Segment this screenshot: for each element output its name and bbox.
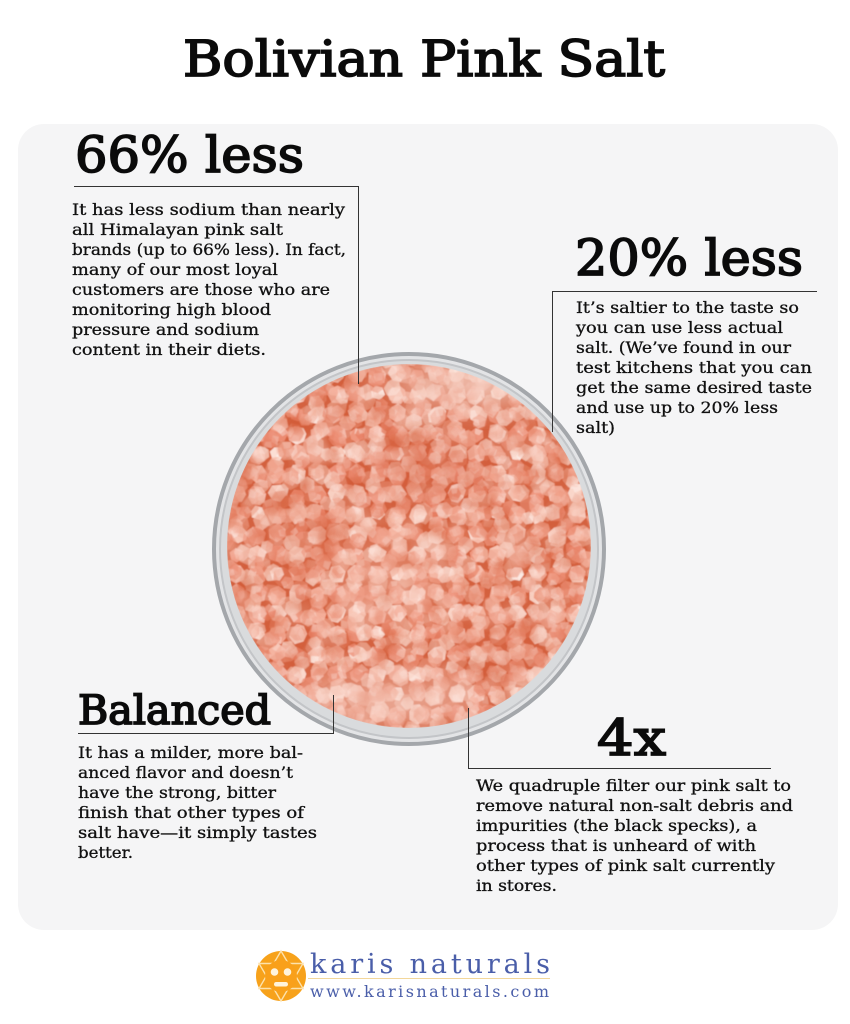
text: 20% less body: test kitchens that you can bbox=[576, 359, 812, 377]
text: Balanced body: anced flavor and doesn’t bbox=[78, 764, 294, 782]
callout: 66% less bbox=[72, 126, 358, 384]
text: 20% less body bbox=[575, 299, 812, 437]
logo: karis naturals bbox=[256, 949, 550, 1001]
title: Bolivian Pink Salt bbox=[183, 30, 665, 88]
text: 4x body: impurities (the black specks), a bbox=[476, 817, 757, 835]
text: 20% less body: and use up to 20% less bbox=[576, 399, 778, 417]
leader line: 20% less bbox=[552, 292, 817, 432]
text: Balanced body: It has a milder, more bal- bbox=[78, 744, 303, 762]
text: 20% less body: you can use less actual bbox=[575, 319, 783, 337]
text: 4x body bbox=[476, 777, 793, 895]
text: Balanced body: finish that other types of bbox=[78, 804, 305, 822]
text: 4x body: process that is unheard of with bbox=[476, 837, 756, 855]
text: 20% less body: salt. (We’ve found in our bbox=[576, 339, 792, 357]
divider bbox=[308, 978, 550, 979]
leader line: 66% less bbox=[74, 186, 358, 384]
text: 4x body: in stores. bbox=[476, 877, 557, 895]
image: dish of pink salt bbox=[214, 354, 604, 744]
callout: Balanced bbox=[78, 688, 334, 862]
text: Balanced body bbox=[78, 744, 317, 862]
callout: 4x bbox=[468, 708, 793, 895]
heading: 20% less: 20% less bbox=[575, 229, 803, 287]
text: 4x body: remove natural non-salt debris and bbox=[476, 797, 793, 815]
text: Balanced body: better. bbox=[78, 844, 133, 862]
text: 20% less body: salt) bbox=[576, 419, 615, 437]
leader line: Balanced bbox=[78, 695, 334, 734]
text: 4x body: other types of pink salt currently bbox=[476, 857, 775, 875]
text: 20% less body: It’s saltier to the taste so bbox=[576, 299, 799, 317]
text: 66% less body: pressure and sodium bbox=[72, 321, 259, 339]
text: 66% less body: content in their diets. bbox=[72, 341, 266, 359]
heading: 4x: 4x bbox=[597, 709, 666, 767]
url: www.karisnaturals.com bbox=[310, 982, 549, 1001]
text: 66% less body bbox=[72, 201, 346, 359]
heading: 66% less: 66% less bbox=[75, 126, 304, 184]
text: 66% less body: many of our most loyal bbox=[72, 261, 278, 279]
text: 66% less body: It has less sodium than nearly bbox=[72, 201, 345, 219]
text: 66% less body: brands (up to 66% less). In fact, bbox=[72, 241, 346, 259]
leader line: 4x bbox=[468, 708, 771, 768]
text: Balanced body: salt have—it simply tastes bbox=[78, 824, 317, 842]
icon: sun mask bbox=[256, 951, 306, 1001]
callout: 20% less bbox=[552, 229, 817, 437]
text: 20% less body: get the same desired taste bbox=[576, 379, 812, 397]
wordmark: karis naturals bbox=[310, 949, 550, 980]
text: Balanced body: have the strong, bitter bbox=[78, 784, 277, 802]
text: 4x body: We quadruple filter our pink salt to bbox=[476, 777, 791, 795]
text: 66% less body: monitoring high blood bbox=[72, 301, 271, 319]
text: 66% less body: customers are those who are bbox=[72, 281, 330, 299]
panel: content card bbox=[18, 124, 838, 930]
text: 66% less body: all Himalayan pink salt bbox=[72, 221, 284, 239]
heading: Balanced: Balanced bbox=[78, 688, 271, 734]
